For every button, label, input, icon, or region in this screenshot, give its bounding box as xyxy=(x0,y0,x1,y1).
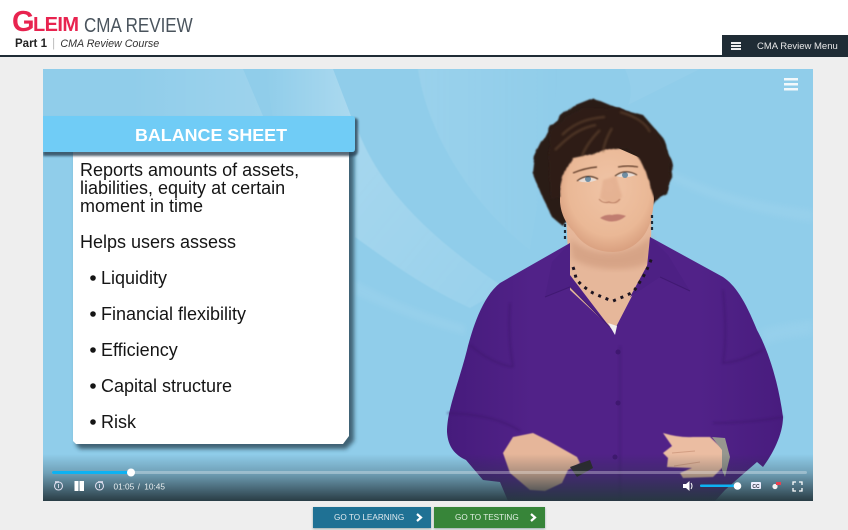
shirt xyxy=(447,237,783,501)
neck xyxy=(566,210,652,330)
learning button xyxy=(313,507,431,528)
icon: video menu xyxy=(784,78,798,90)
video background xyxy=(43,69,813,501)
icon: settings xyxy=(772,482,781,489)
testing button xyxy=(434,507,545,528)
slide text: Risk xyxy=(101,412,137,432)
menu button xyxy=(722,35,848,57)
icon: forward xyxy=(96,482,104,490)
undershirt xyxy=(608,323,617,335)
menu label: CMA Review Menu xyxy=(757,41,838,52)
presenter xyxy=(447,98,783,501)
video player xyxy=(43,69,813,501)
shirt folds xyxy=(447,290,783,501)
eyes xyxy=(573,166,638,182)
slide text: Efficiency xyxy=(101,340,178,360)
slide card xyxy=(43,116,358,449)
control bar xyxy=(43,454,813,501)
testing label: GO TO TESTING xyxy=(455,513,519,522)
card header xyxy=(43,116,358,156)
nose shading xyxy=(600,176,622,203)
hair highlights xyxy=(555,112,650,156)
timestamp: 01:05 / 10:45 xyxy=(114,482,165,492)
card body xyxy=(73,150,354,449)
icon: pause xyxy=(74,481,84,491)
icon: chevron xyxy=(416,513,423,522)
lips xyxy=(600,214,626,222)
slide text: Helps users assess xyxy=(80,232,236,252)
slide text xyxy=(80,160,299,432)
earrings xyxy=(565,215,652,242)
card header: BALANCE SHEET xyxy=(135,125,287,145)
slide text: Financial flexibility xyxy=(101,304,246,324)
necklace xyxy=(573,257,652,301)
icon: rewind xyxy=(54,482,62,490)
icon: menu xyxy=(731,42,741,50)
progress track xyxy=(52,471,807,474)
logo: CMA REVIEW xyxy=(84,14,193,37)
left hand xyxy=(503,433,580,491)
logo: G xyxy=(12,6,34,38)
slide text: Reports amounts of assets, xyxy=(80,160,299,180)
logo xyxy=(12,6,193,38)
icon: chevron xyxy=(530,513,537,522)
slide text: Liquidity xyxy=(101,268,167,288)
buttons xyxy=(612,350,620,460)
scrubber xyxy=(127,468,135,476)
progress fill xyxy=(52,471,131,474)
hair back xyxy=(533,98,673,226)
hair fringe xyxy=(548,108,670,200)
collar xyxy=(545,237,690,330)
pointer xyxy=(570,460,593,477)
page header xyxy=(0,0,848,57)
logo: LEIM xyxy=(33,14,78,36)
slide text: Capital structure xyxy=(101,376,232,396)
learning label: GO TO LEARNING xyxy=(334,513,404,522)
right hand xyxy=(663,433,727,478)
face xyxy=(560,140,654,252)
icon: volume xyxy=(683,481,690,491)
icon: captions xyxy=(751,482,761,490)
slide text: liabilities, equity at certain xyxy=(80,178,285,198)
icon: captions: CC xyxy=(752,484,760,490)
watch xyxy=(712,437,730,477)
slide text: moment in time xyxy=(80,196,203,216)
course subtitle: Part 1 | CMA Review Course xyxy=(15,38,159,50)
volume slider xyxy=(700,482,741,490)
icon: fullscreen xyxy=(793,482,802,491)
